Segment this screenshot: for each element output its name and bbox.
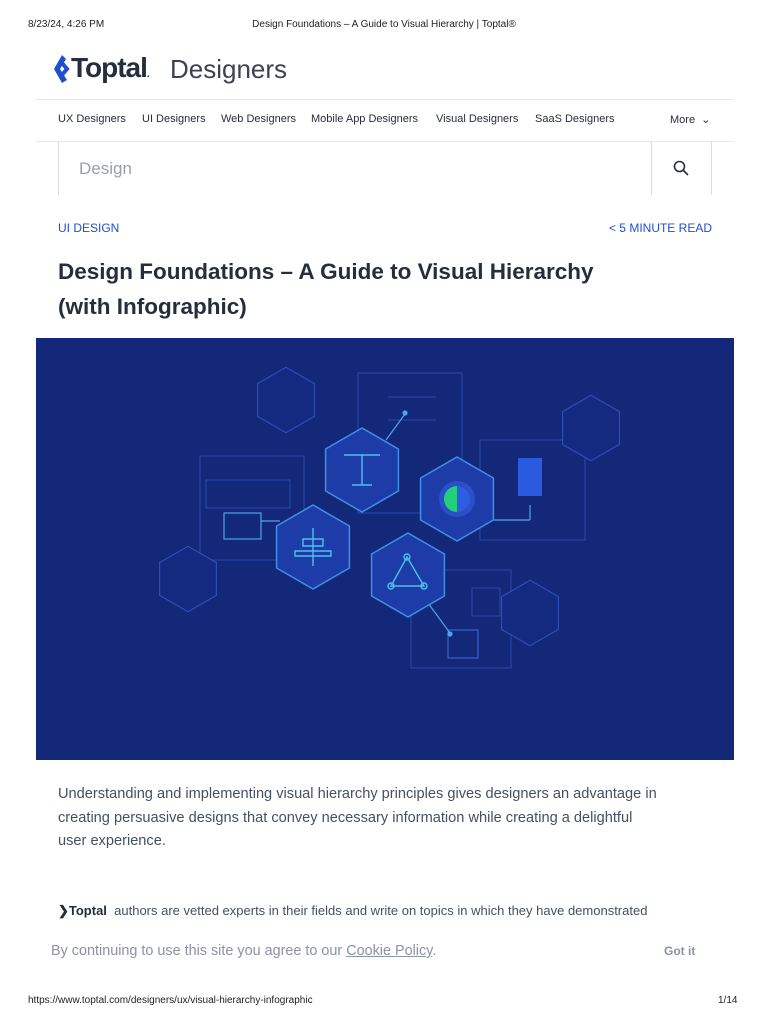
print header: Design Foundations – A Guide to Visual Hierarchy | Toptal®	[252, 19, 516, 30]
logo: Designers	[170, 54, 287, 84]
title: (with Infographic)	[58, 294, 247, 319]
logo	[54, 52, 287, 84]
title: Design Foundations – A Guide to Visual Hierarchy	[58, 259, 594, 284]
cookie bar: By continuing to use this site you agree to our Cookie Policy.	[51, 943, 436, 959]
category: UI DESIGN	[58, 221, 119, 235]
print header	[28, 19, 516, 30]
nav: UX Designers	[58, 113, 126, 125]
print footer: 1/14	[718, 995, 737, 1006]
nav: Web Designers	[221, 113, 296, 125]
print header: 8/23/24, 4:26 PM	[28, 19, 104, 30]
intro text: Understanding and implementing visual hierarchy principles gives designers an advantage in creating persuasive designs that convey necessary information while creating a delightful user experience.	[58, 786, 657, 849]
nav: UI Designers	[142, 113, 206, 125]
logo: Toptal.	[71, 52, 149, 83]
hero image	[36, 338, 734, 760]
search box: Design	[79, 159, 132, 178]
authors note: ❯Toptal authors are vetted experts in their fields and write on topics in which they have demonstrated	[58, 903, 647, 918]
text: < 5 MINUTE READ	[609, 221, 712, 235]
nav: More ⌄	[670, 114, 710, 126]
nav: Mobile App Designers	[311, 113, 418, 125]
print footer	[28, 995, 738, 1006]
nav: Visual Designers	[436, 113, 518, 125]
cookie bar	[0, 928, 768, 978]
cookie bar: Got it	[664, 944, 695, 958]
title	[58, 259, 594, 319]
search box	[58, 142, 712, 195]
nav: SaaS Designers	[535, 113, 614, 125]
nav	[36, 99, 734, 142]
print footer: https://www.toptal.com/designers/ux/visual-hierarchy-infographic	[28, 995, 313, 1006]
